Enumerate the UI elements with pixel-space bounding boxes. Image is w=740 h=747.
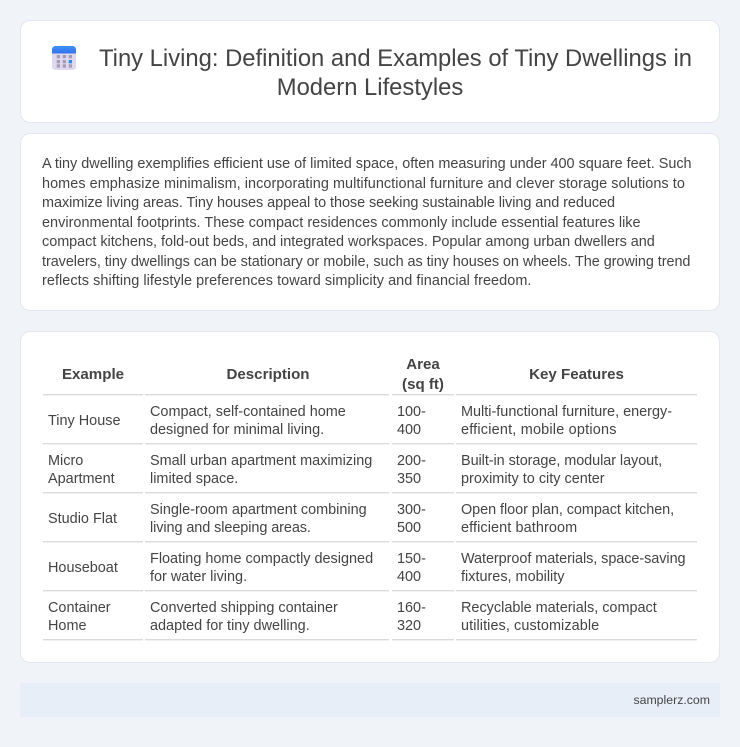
row: Micro Apartment: 200- [397,453,426,469]
text block: description: environmental footprints. These compact residences commonly include essential features like [42,214,641,230]
row: Houseboat: 150- [397,551,426,567]
row: Studio Flat [48,502,674,536]
row: Micro Apartment: Micro [48,453,83,469]
row: Container Home: 160- [397,600,426,616]
row: Micro Apartment: Apartment [48,471,115,487]
table header: Area [406,356,440,373]
panel: title card [20,20,720,123]
row: Studio Flat: efficient bathroom [461,520,577,536]
text block: description: travelers, tiny dwellings can be stationary or mobile, such as tiny houses on wheels. The growing trend [42,254,690,270]
row: Studio Flat: 500 [397,520,421,536]
text block: description: A tiny dwelling exemplifies efficient use of limited space, often measuring under 400 square feet. Such [42,156,692,172]
row: Houseboat: fixtures, mobility [461,569,564,585]
row: Houseboat: for water living. [150,569,247,585]
row: Container Home: Home [48,618,87,634]
row: Houseboat [48,551,686,585]
panel: description card [20,133,720,311]
text block: description: homes emphasize minimalism, incorporating multifunctional furniture and clever storage solutions to [42,176,685,192]
footer bar [20,683,720,717]
panel: table card [20,331,720,663]
row: Container Home: Recyclable materials, compact [461,600,657,616]
icon: calendar grid [52,46,76,70]
row: Houseboat: Waterproof materials, space-saving [461,551,686,567]
row: Container Home: Container [48,600,111,616]
row: Studio Flat: Studio Flat [48,511,117,527]
row: Tiny House: efficient, mobile options [461,422,617,438]
row: Tiny House: Multi-functional furniture, energy- [461,404,672,420]
row: Container Home: utilities, customizable [461,618,599,634]
table header: Example [62,366,124,383]
heading: title [99,45,692,101]
text block: description: reflects shifting lifestyle preferences toward simplicity and financial freedom. [42,273,531,289]
row: Tiny House: 400 [397,422,421,438]
row: Studio Flat: Single-room apartment combining [150,502,367,518]
row: Houseboat: 400 [397,569,421,585]
table header: (sq ft) [402,376,444,392]
row: Micro Apartment: Built-in storage, modular layout, [461,453,662,469]
row: Container Home: adapted for tiny dwelling. [150,618,310,634]
text block: description: maximize living areas. Tiny houses appeal to those seeking sustainable living and reduced [42,195,615,211]
table header: Description [226,366,310,383]
row: Micro Apartment [48,453,662,487]
row: Studio Flat: living and sleeping areas. [150,520,311,536]
row: Tiny House: 100- [397,404,426,420]
footer text: samplerz.com [633,692,710,706]
row: Studio Flat: Open floor plan, compact kitchen, [461,502,674,518]
row: Tiny House: Tiny House [48,413,120,429]
table header [62,356,624,392]
row: Houseboat: Floating home compactly designed [150,551,373,567]
text block: description: compact kitchens, fold-out beds, and integrated workspaces. Popular among urban dwellers and [42,234,655,250]
row: Tiny House [48,404,672,438]
row: Tiny House: Compact, self-contained home [150,404,346,420]
row: Houseboat: Houseboat [48,560,118,576]
row: Container Home: 320 [397,618,421,634]
text block: description [42,156,692,289]
row: Tiny House: designed for minimal living. [150,422,324,438]
row: Container Home: Converted shipping container [150,600,338,616]
row: Micro Apartment: 350 [397,471,421,487]
row: Studio Flat: 300- [397,502,426,518]
heading: title: Modern Lifestyles [277,74,463,101]
heading: title: Tiny Living: Definition and Examples of Tiny Dwellings in [99,45,692,72]
row: Container Home [48,600,657,634]
row: Micro Apartment: Small urban apartment maximizing [150,453,372,469]
table header: Key Features [529,366,624,383]
row: Micro Apartment: proximity to city center [461,471,605,487]
row: Micro Apartment: limited space. [150,471,238,487]
